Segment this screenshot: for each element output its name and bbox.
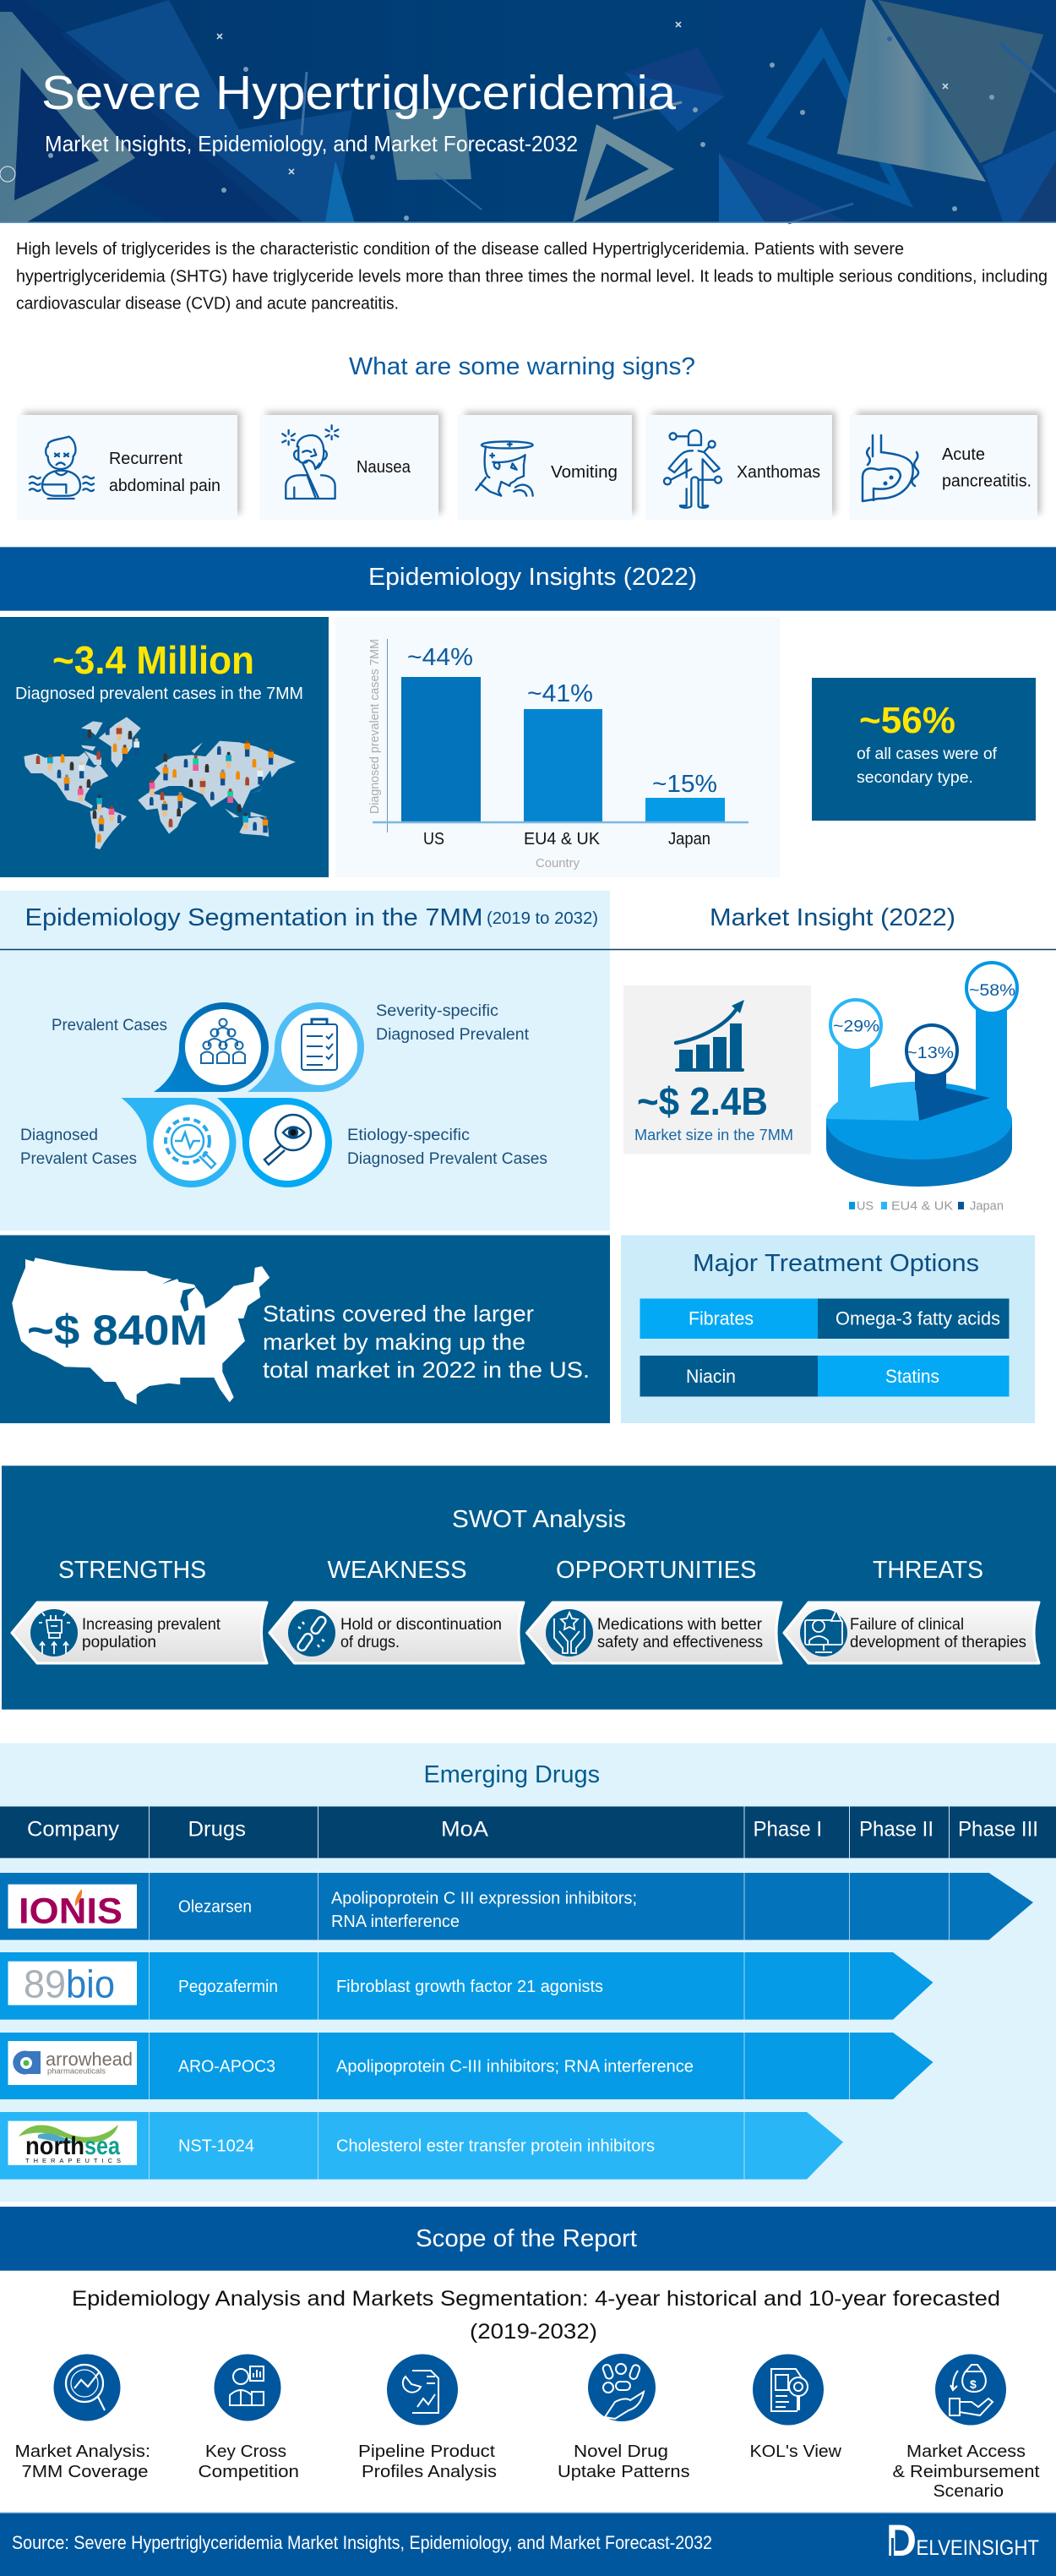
card: nausea xyxy=(259,412,442,520)
pie callout: Japan xyxy=(906,1025,957,1076)
panel: major treatment options xyxy=(621,1236,1035,1423)
section band: epidemiology insights: Epidemiology Insights (2022) xyxy=(368,564,697,591)
section band: epidemiology insights xyxy=(0,547,1056,611)
chevron: weakness xyxy=(269,1602,524,1663)
treatment: Omega-3 fatty acids xyxy=(818,1298,1009,1339)
logo: Arrowhead: pharmaceuticals xyxy=(47,2067,106,2077)
warning sign cards xyxy=(17,412,1041,520)
drug row: Pegozafermin: Pegozafermin xyxy=(178,1978,278,1996)
card text xyxy=(109,450,220,495)
icon: inflamed stomach xyxy=(863,435,918,501)
bar: US: US xyxy=(423,830,444,849)
card text: Xanthomas xyxy=(737,463,820,482)
segmentation labels: Etiology-specific xyxy=(347,1127,470,1144)
panel: diagnosed prevalent cases xyxy=(0,617,329,877)
bar: EU4 and UK: EU4 & UK xyxy=(524,830,601,849)
bar: EU4 and UK: ~41% xyxy=(527,680,593,707)
SWOT column headings: WEAKNESS xyxy=(328,1557,466,1584)
pie legend: EU4 & UK xyxy=(891,1198,953,1214)
logo: 89bio: 89 xyxy=(24,1962,66,2006)
panel: major treatment options: Major Treatment Options xyxy=(693,1250,979,1277)
teardrop: diagnosed prevalent xyxy=(122,1098,237,1187)
scope description: (2019-2032) xyxy=(470,2320,597,2344)
teardrop: prevalent cases xyxy=(154,1002,269,1092)
table header: MoA xyxy=(441,1817,488,1841)
scope item: market access: & Reimbursement xyxy=(892,2463,1040,2481)
header banner xyxy=(0,0,1056,223)
scope item: pipeline product profiles xyxy=(358,2355,497,2481)
segmentation labels: Severity-specific xyxy=(376,1002,498,1020)
drug row: ARO-APOC3: ARO-APOC3 xyxy=(178,2057,275,2076)
drug row: NST-1024: NST-1024 xyxy=(178,2137,254,2156)
pie legend: Japan xyxy=(970,1198,1004,1214)
logo: Arrowhead xyxy=(8,2041,137,2085)
scope item: key cross competition: Competition xyxy=(198,2463,299,2481)
drug row: ARO-APOC3 xyxy=(0,2033,933,2099)
statins text xyxy=(263,1302,590,1383)
scope item: novel drug uptake: Uptake Patterns xyxy=(558,2463,689,2481)
chevron: weakness: of drugs. xyxy=(340,1634,400,1651)
chevron: threats xyxy=(784,1602,1039,1663)
chevron: opportunities: Medications with better xyxy=(597,1616,763,1634)
logo: DelveInsight: ELVEINSIGHT xyxy=(916,2536,1039,2560)
panel: SWOT analysis: SWOT Analysis xyxy=(452,1506,626,1533)
x axis label: Country xyxy=(536,856,580,870)
teardrop: etiology-specific xyxy=(217,1098,332,1187)
logo: 89bio: bio xyxy=(66,1962,115,2006)
bar: US xyxy=(401,644,481,849)
scope item: novel drug uptake: Novel Drug xyxy=(574,2442,668,2461)
logo: 89bio xyxy=(8,1962,137,2006)
drug row: Olezarsen: Olezarsen xyxy=(178,1898,252,1917)
scope description xyxy=(72,2287,1000,2344)
segmentation labels: Prevalent Cases xyxy=(52,1017,167,1034)
pie legend: US xyxy=(857,1198,874,1214)
heading: market insight: Market Insight (2022) xyxy=(710,904,955,931)
drug row: Olezarsen: Apolipoprotein C III expression inhibitors; xyxy=(331,1890,637,1908)
teardrop: severity-specific xyxy=(248,1002,364,1092)
scope item: market access: Scenario xyxy=(933,2482,1004,2501)
scope description: Epidemiology Analysis and Markets Segmentation: 4-year historical and 10-year forecasted xyxy=(72,2287,1000,2311)
panel: SWOT analysis xyxy=(2,1465,1056,1710)
segmentation labels xyxy=(20,1002,547,1168)
table header: Phase III xyxy=(958,1817,1038,1841)
logo: Northsea: THERAPEUTICS xyxy=(25,2157,121,2164)
logo: Northsea: north xyxy=(25,2132,84,2160)
statins text: Statins covered the larger xyxy=(263,1302,534,1327)
chevron: strengths: Increasing prevalent xyxy=(82,1616,221,1634)
callout: secondary type share: ~56% xyxy=(859,700,955,741)
segmentation heading: Epidemiology Segmentation in the 7MM xyxy=(25,904,483,931)
treatment: Omega-3 fatty acids: Omega-3 fatty acids xyxy=(836,1308,1000,1329)
scope item: pipeline product profiles: Profiles Analysis xyxy=(362,2463,497,2481)
pie callout: US xyxy=(966,963,1017,1013)
card: xanthomas xyxy=(645,412,836,520)
panel: US market value: ~$ 840M xyxy=(27,1307,208,1354)
treatment: Fibrates xyxy=(640,1298,818,1339)
SWOT column headings: STRENGTHS xyxy=(58,1557,206,1584)
scope item: market access: Market Access xyxy=(906,2442,1026,2461)
section band: scope of the report xyxy=(0,2207,1056,2271)
bar: Japan: ~15% xyxy=(652,771,717,798)
panel: emerging drugs: Emerging Drugs xyxy=(424,1761,600,1788)
panel: emerging drugs xyxy=(0,1743,1056,2202)
intro paragraph: hypertriglyceridemia (SHTG) have triglyceride levels more than three times the normal level. It leads to multiple serious conditions, including xyxy=(16,267,1048,286)
icon: vomiting person xyxy=(476,441,533,496)
drug row: NST-1024: Cholesterol ester transfer protein inhibitors xyxy=(336,2137,655,2156)
title: Severe Hypertriglyceridemia xyxy=(41,66,676,120)
segmentation heading: (2019 to 2032) xyxy=(487,909,598,928)
SWOT column headings: OPPORTUNITIES xyxy=(556,1557,757,1584)
scope item: market analysis: 7MM Coverage xyxy=(22,2463,149,2481)
SWOT column headings: THREATS xyxy=(873,1557,983,1584)
bar: Japan: Japan xyxy=(668,830,710,849)
card text: pancreatitis. xyxy=(942,472,1032,490)
scope item: pipeline product profiles: Pipeline Product xyxy=(358,2442,495,2461)
chevron: opportunities: safety and effectiveness xyxy=(597,1634,763,1651)
card: acute pancreatitis xyxy=(850,412,1041,520)
drug row: ARO-APOC3: Apolipoprotein C-III inhibitors; RNA interference xyxy=(336,2057,694,2076)
bar: Japan xyxy=(645,771,725,849)
section band: scope of the report: Scope of the Report xyxy=(416,2225,637,2252)
table header: Phase II xyxy=(859,1817,934,1841)
source line: Source: Severe Hypertriglyceridemia Market Insights, Epidemiology, and Market Forecast-2032 xyxy=(12,2532,712,2553)
heading: warning signs: What are some warning signs? xyxy=(349,353,695,380)
pie callout: US: ~58% xyxy=(969,982,1015,1000)
icon: nauseous person xyxy=(282,425,338,499)
segmentation labels: Diagnosed Prevalent Cases xyxy=(347,1150,547,1168)
scope item: novel drug uptake xyxy=(558,2354,689,2481)
treatment: Fibrates: Fibrates xyxy=(689,1308,754,1329)
bar: US: ~44% xyxy=(407,644,473,671)
panel: market size: Market size in the 7MM xyxy=(634,1127,793,1143)
segmentation labels: Prevalent Cases xyxy=(20,1150,137,1168)
card text: Recurrent xyxy=(109,450,182,468)
chevron: threats: Failure of clinical xyxy=(850,1616,964,1634)
scope item: KOL view: KOL's View xyxy=(750,2442,842,2461)
logo: Ionis xyxy=(8,1885,137,1932)
treatment: Niacin xyxy=(640,1356,818,1396)
statins text: total market in 2022 in the US. xyxy=(263,1357,590,1383)
treatment: Statins: Statins xyxy=(885,1366,939,1387)
callout: secondary type share xyxy=(812,678,1036,821)
pie callout: EU4 and UK xyxy=(830,1000,881,1051)
panel: epidemiology segmentation xyxy=(0,891,610,1231)
intro paragraph: cardiovascular disease (CVD) and acute pancreatitis. xyxy=(16,294,399,313)
card text: Acute xyxy=(942,445,985,464)
segmentation labels: Diagnosed Prevalent xyxy=(376,1026,530,1044)
icon: growth chart xyxy=(675,1000,744,1072)
bar: EU4 and UK xyxy=(524,680,602,849)
card: abdominal pain xyxy=(17,412,241,520)
drug row: Olezarsen xyxy=(0,1873,1033,1940)
panel: bar chart of prevalent cases by country xyxy=(335,617,780,877)
statins text: market by making up the xyxy=(263,1329,525,1355)
table header: Drugs xyxy=(188,1817,246,1841)
table header xyxy=(0,1807,1056,1858)
world map with people xyxy=(24,717,296,849)
card text: abdominal pain xyxy=(109,477,220,495)
chevron: strengths xyxy=(12,1602,267,1663)
chevron: opportunities xyxy=(527,1602,781,1663)
drug row: Pegozafermin xyxy=(0,1952,933,2020)
scope item: KOL view xyxy=(750,2355,842,2461)
logo: DelveInsight: D xyxy=(886,2516,917,2566)
logo: Northsea: sea xyxy=(84,2132,120,2160)
pie callout: EU4 and UK: ~29% xyxy=(833,1018,879,1036)
US map xyxy=(12,1258,269,1405)
treatment: Niacin: Niacin xyxy=(686,1366,736,1387)
card text xyxy=(942,445,1032,490)
segmentation labels: Diagnosed xyxy=(20,1127,98,1144)
treatment: Statins xyxy=(818,1356,1009,1396)
logo: DelveInsight xyxy=(886,2516,1039,2566)
card text: Vomiting xyxy=(551,463,618,482)
scope item: key cross competition xyxy=(198,2355,299,2481)
panel: market size xyxy=(623,985,811,1154)
stat caption: Diagnosed prevalent cases in the 7MM xyxy=(15,685,303,703)
panel: market size: ~$ 2.4B xyxy=(637,1079,768,1123)
panel: US market value xyxy=(0,1236,610,1423)
drug row: Pegozafermin: Fibroblast growth factor 21 agonists xyxy=(336,1978,603,1996)
scope item: market access: $ xyxy=(970,2377,977,2391)
intro paragraph xyxy=(16,240,1048,313)
scope item: key cross competition: Key Cross xyxy=(205,2442,286,2461)
icon: body with nodules xyxy=(664,430,721,508)
drug row: Olezarsen: RNA interference xyxy=(331,1913,460,1931)
card text: Nausea xyxy=(357,458,411,477)
pie legend xyxy=(849,1198,1004,1214)
pie callout: Japan: ~13% xyxy=(906,1045,954,1062)
logo: Ionis: IONIS xyxy=(19,1891,122,1932)
chart: 3D pie market share xyxy=(826,963,1017,1214)
scope item: market analysis xyxy=(15,2355,150,2481)
logo: Northsea xyxy=(8,2121,137,2165)
stat: 3.4 million: ~3.4 Million xyxy=(52,638,254,682)
table header: Company xyxy=(27,1817,120,1841)
footer xyxy=(0,2513,1056,2576)
chevron: strengths: population xyxy=(82,1634,156,1651)
drug row: NST-1024 xyxy=(0,2112,843,2180)
callout: secondary type share: of all cases were of xyxy=(857,745,998,763)
table header: Phase I xyxy=(754,1817,822,1841)
intro paragraph: High levels of triglycerides is the characteristic condition of the disease called Hypertriglyceridemia. Patients with severe xyxy=(16,240,904,259)
icon: man with abdominal pain xyxy=(30,437,94,499)
SWOT column headings xyxy=(58,1557,983,1584)
scope item: market access xyxy=(892,2355,1040,2501)
subtitle: Market Insights, Epidemiology, and Market Forecast-2032 xyxy=(45,131,578,156)
scope item: market analysis: Market Analysis: xyxy=(15,2442,150,2461)
chevron: threats: development of therapies xyxy=(850,1634,1026,1651)
card: vomiting xyxy=(458,412,635,520)
callout: secondary type share: secondary type. xyxy=(857,769,973,787)
y axis label: Diagnosed prevalent cases 7MM xyxy=(367,639,382,814)
chevron: weakness: Hold or discontinuation xyxy=(340,1616,502,1634)
logo: Arrowhead: arrowhead xyxy=(46,2049,133,2070)
